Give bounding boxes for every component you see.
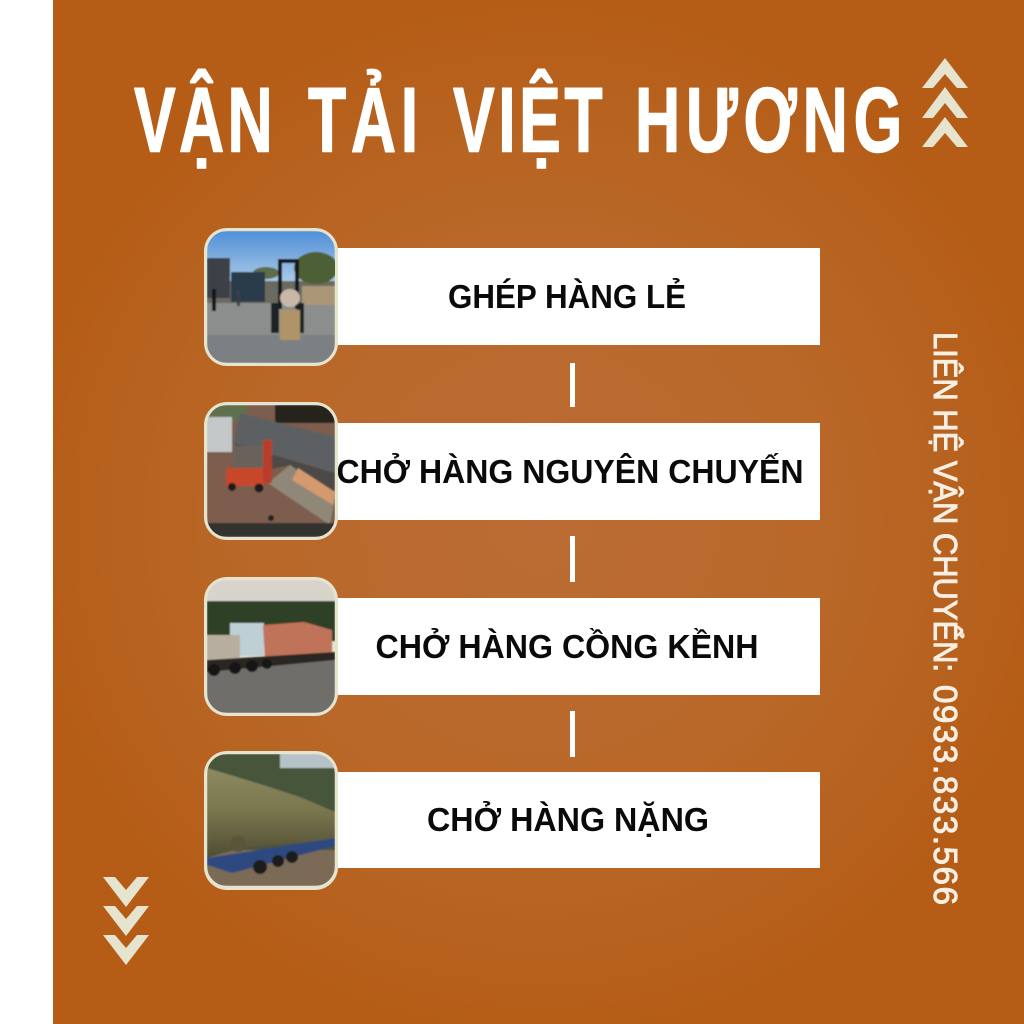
connector 2 [570,536,575,582]
photo 3: crates on low-bed trailer [204,577,338,716]
label bar 4 [338,772,820,868]
title: VẬN [134,68,273,171]
connector 3 [570,711,575,757]
panel: chở hàng cồng kềnh [204,577,820,716]
title [134,68,902,171]
panel: chở hàng nguyên chuyến [204,402,820,540]
vertical contact text [927,332,964,905]
label bar 2: CHỞ HÀNG NGUYÊN CHUYẾN [336,453,804,490]
title: TẢI [308,68,418,171]
label bar 4: CHỞ HÀNG NẶNG [427,801,709,838]
title: VIỆT [453,68,603,171]
icon: down chevrons [103,877,149,965]
vertical contact text: 0933.833.566 [927,685,964,905]
label bar 1 [338,248,820,345]
vertical contact text: LIÊN HỆ VẬN CHUYỂN: [927,332,964,672]
photo 2: forklift loading truck [204,402,338,540]
label bar 3 [338,598,820,695]
label bar 3: CHỞ HÀNG CỒNG KỀNH [376,628,758,665]
label bar 1: GHÉP HÀNG LẺ [448,278,686,315]
title: HƯƠNG [635,68,902,171]
panel: ghép hàng lẻ [204,228,820,366]
connector 1 [570,363,575,407]
photo 1: forklift in yard [204,228,338,366]
panel: chở hàng nặng [204,751,820,890]
label bar 2 [336,423,820,520]
photo 4: tank on trailer [204,751,338,890]
icon: up chevrons [922,58,968,147]
